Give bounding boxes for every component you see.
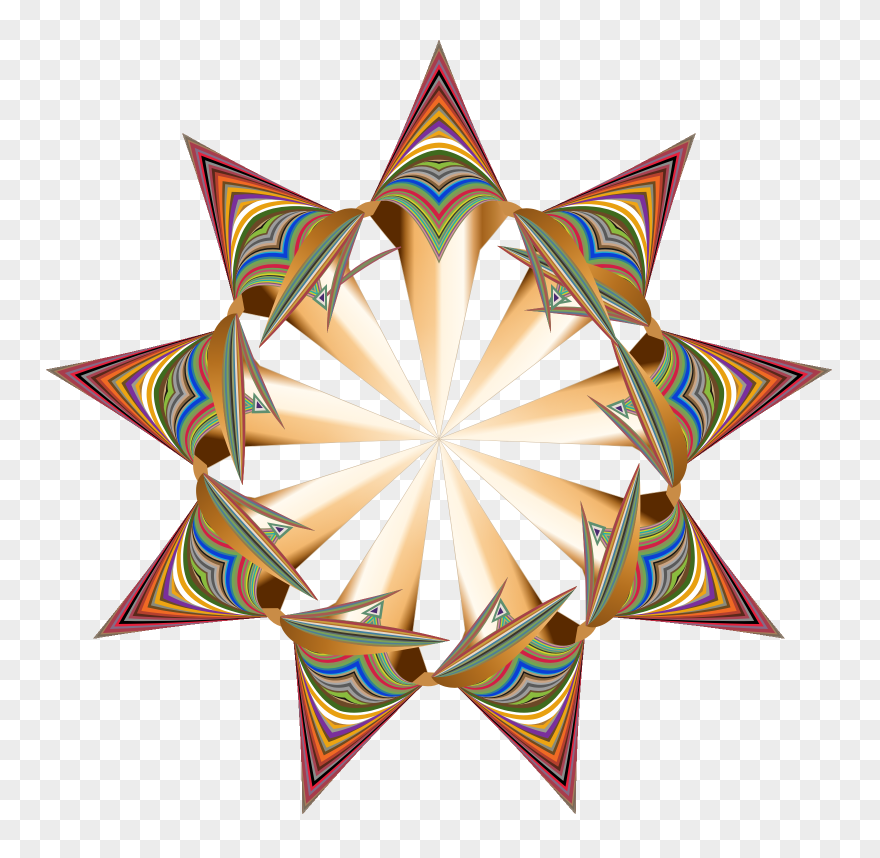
radial gold spikes	[184, 193, 694, 695]
bronze striped leaves	[144, 201, 738, 726]
thin striped band, upper left	[319, 247, 401, 303]
